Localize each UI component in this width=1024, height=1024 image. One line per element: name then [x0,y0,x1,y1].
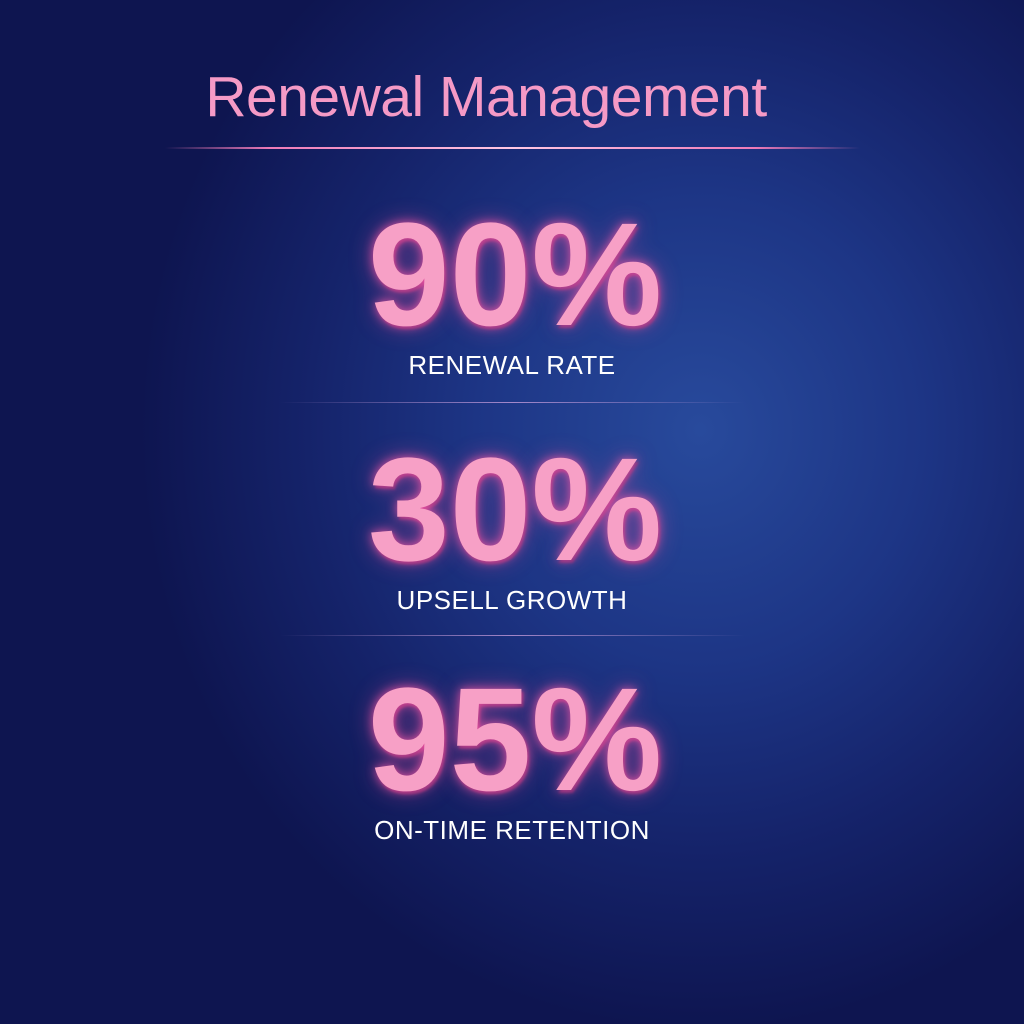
label upsell growth: UPSELL GROWTH [397,585,627,615]
stat: renewal rate [358,193,672,380]
stat: on-time retention [358,658,673,845]
label renewal rate: RENEWAL RATE [408,350,616,380]
title underline [165,147,860,149]
number 30%: 30% [368,428,662,592]
label on-time retention: ON-TIME RETENTION [374,815,650,845]
number 95%: 95% [368,658,662,822]
title: Renewal Management [205,65,767,129]
stat: upsell growth [361,428,672,615]
number 90%: 90% [368,193,662,357]
